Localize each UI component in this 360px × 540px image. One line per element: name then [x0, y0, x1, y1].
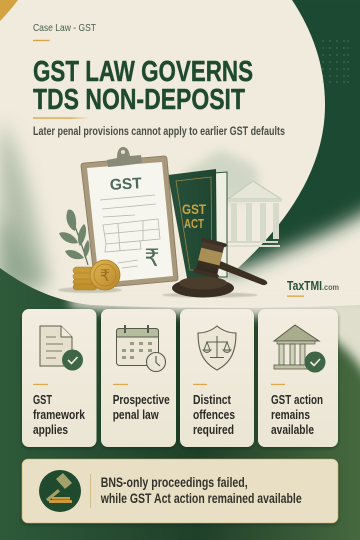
- label: GST action: [271, 393, 323, 407]
- icon: gavel badge: [39, 470, 81, 512]
- icon: shield with scales: [198, 326, 236, 370]
- left pale wash: [0, 120, 50, 285]
- label: framework: [33, 408, 85, 422]
- eyebrow: case law: [33, 22, 96, 41]
- title underline: [33, 117, 90, 119]
- accent: [113, 384, 128, 385]
- illustration: gold coins: ₹: [100, 268, 110, 285]
- card: Distinct offences required: [180, 309, 254, 447]
- subtitle: Later penal provisions cannot apply to earlier GST defaults: [33, 126, 285, 138]
- title: GST LAW GOVERNS: [33, 56, 253, 88]
- lower dark area: [0, 268, 360, 540]
- illustration: gavel: [162, 237, 267, 298]
- label: [113, 393, 170, 422]
- accent: [271, 384, 285, 385]
- illustration: plant: [59, 210, 89, 265]
- brand: TaxTMI.com: TaxTMI: [287, 278, 322, 293]
- rupee mark: ₹: [144, 245, 160, 272]
- callout text: while GST Act action remained available: [100, 491, 302, 506]
- title: [33, 56, 253, 116]
- brand: TaxTMI.com: [287, 278, 339, 297]
- clipboard lines and table: [100, 195, 160, 268]
- accent: [33, 384, 48, 385]
- card: Prospective penal law: [101, 309, 176, 447]
- card: GST framework applies: [22, 309, 96, 447]
- label: GST: [33, 393, 52, 407]
- book title: GST: [182, 201, 206, 217]
- icon: document with check: [40, 326, 83, 370]
- label: offences: [193, 408, 235, 422]
- brand: TaxTMI.com: .com: [322, 282, 339, 292]
- icon: courthouse with check: [274, 325, 326, 372]
- illustration: book: ACT: [184, 216, 204, 231]
- icon: calendar with clock: [116, 325, 166, 372]
- top right green area: [225, 0, 360, 275]
- illustration: book: [168, 169, 227, 278]
- label: applies: [33, 423, 68, 437]
- dot grid: [322, 40, 349, 83]
- label: Distinct: [193, 393, 232, 407]
- label: [271, 393, 323, 437]
- eyebrow: case law: Case Law - GST: [33, 22, 96, 34]
- cream disc: [0, 0, 325, 300]
- gold corner: [0, 0, 18, 21]
- card: GST action remains available: [258, 309, 338, 447]
- callout: conclusion: [22, 459, 338, 523]
- clipboard heading: GST: [109, 175, 143, 194]
- label: remains: [271, 408, 310, 422]
- label: Prospective: [113, 393, 170, 407]
- label: penal law: [113, 408, 159, 422]
- clipboard clip: [107, 147, 142, 167]
- title: TDS NON-DEPOSIT: [33, 84, 245, 116]
- label: [33, 393, 85, 437]
- label: available: [271, 423, 314, 437]
- label: [193, 393, 235, 437]
- callout text: BNS-only proceedings failed,: [101, 475, 248, 490]
- label: required: [193, 423, 234, 437]
- illustration: gold coins: [58, 260, 122, 293]
- callout text: [100, 475, 302, 506]
- court building backdrop: [183, 152, 282, 247]
- illustration: clipboard: [81, 147, 178, 288]
- accent: [193, 384, 207, 385]
